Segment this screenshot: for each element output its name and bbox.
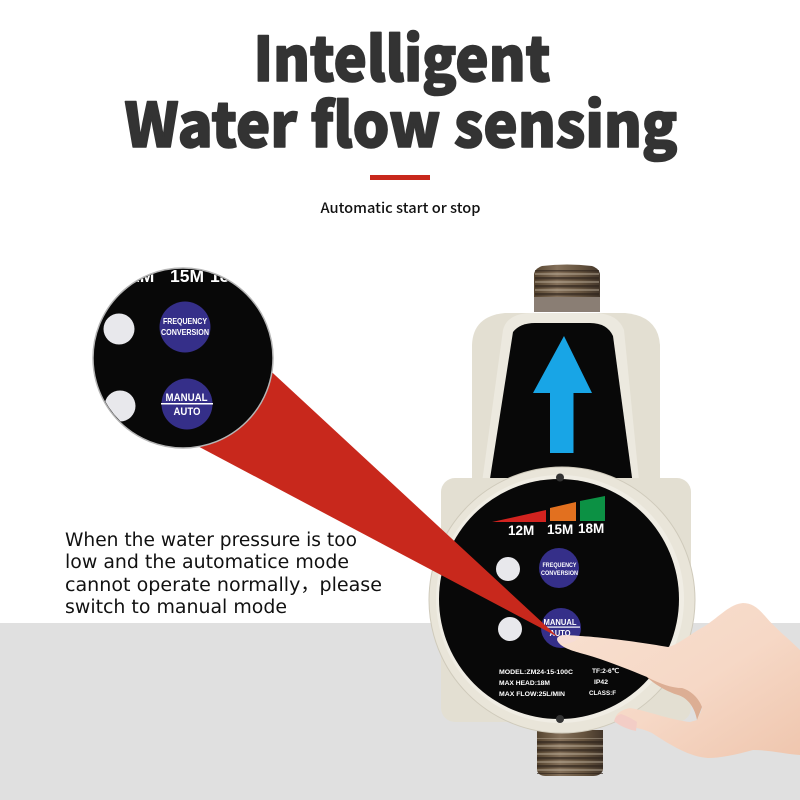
black arrow panel: [481, 313, 640, 490]
pressure level indicator: 15M: [547, 522, 573, 537]
white indicator lights: [496, 557, 522, 641]
description text: [65, 530, 382, 618]
button: frequency conversion: [539, 548, 579, 588]
title: Intelligent: [254, 10, 550, 99]
magnifier callout: [93, 266, 273, 448]
pressure level indicator: 12M: [508, 523, 534, 538]
model specifications: MAX HEAD:18M: [499, 680, 550, 687]
round control face: [429, 467, 695, 733]
screws: [556, 474, 564, 482]
magnified button: frequency conversion: CONVERSION: [161, 327, 209, 337]
button: manual auto: AUTO: [550, 628, 571, 638]
pressure level indicator: 18M: [578, 521, 604, 536]
description text: When the water pressure is too: [65, 530, 357, 551]
rear square plate: [441, 478, 691, 722]
button: frequency conversion: CONVERSION: [541, 570, 578, 577]
magnified button: manual auto: [161, 378, 213, 430]
magnified level labels: 2M: [130, 266, 154, 286]
model specifications: IP42: [594, 679, 608, 686]
index fingernail: [557, 635, 579, 644]
magnified indicator lights: [104, 314, 134, 344]
icon: blue flow arrow: [533, 336, 592, 453]
hand pressing button: [557, 603, 800, 758]
description text: cannot operate normally，please: [65, 575, 382, 596]
button: frequency conversion: FREQUENCY: [542, 562, 577, 569]
model specifications: [499, 667, 619, 698]
magnified button: manual auto: AUTO: [174, 406, 201, 418]
finger shadow: [647, 677, 702, 720]
magnified button: manual auto: MANUAL: [166, 392, 208, 404]
title: [124, 10, 678, 165]
button: manual auto: [541, 608, 581, 648]
top threaded fitting: [534, 264, 600, 312]
pump product photo: [429, 264, 695, 776]
model specifications: MAX FLOW:25L/MIN: [499, 691, 565, 698]
button: manual auto: MANUAL: [544, 617, 576, 627]
rear plate upper: [472, 313, 660, 490]
subtitle: Automatic start or stop: [320, 198, 481, 218]
magnifier callout: 18M: [210, 266, 244, 286]
model specifications: CLASS:F: [589, 690, 616, 697]
gray floor background: [0, 623, 800, 800]
magnified button: frequency conversion: [160, 302, 210, 352]
bottom threaded fitting: [537, 730, 603, 776]
magnified button: frequency conversion: FREQUENCY: [163, 316, 207, 326]
description text: switch to manual mode: [65, 597, 287, 618]
pressure level indicator: [492, 496, 605, 538]
red magnifier beam: [190, 363, 558, 637]
magnifier callout: 15M: [170, 266, 204, 286]
model specifications: MODEL:ZM24-15-100C: [499, 669, 573, 676]
red divider accent: [370, 175, 430, 180]
description text: low and the automatice mode: [65, 552, 349, 573]
thumb nail: [614, 714, 637, 731]
title: Water flow sensing: [124, 76, 678, 165]
model specifications: TF:2-6℃: [592, 667, 619, 675]
